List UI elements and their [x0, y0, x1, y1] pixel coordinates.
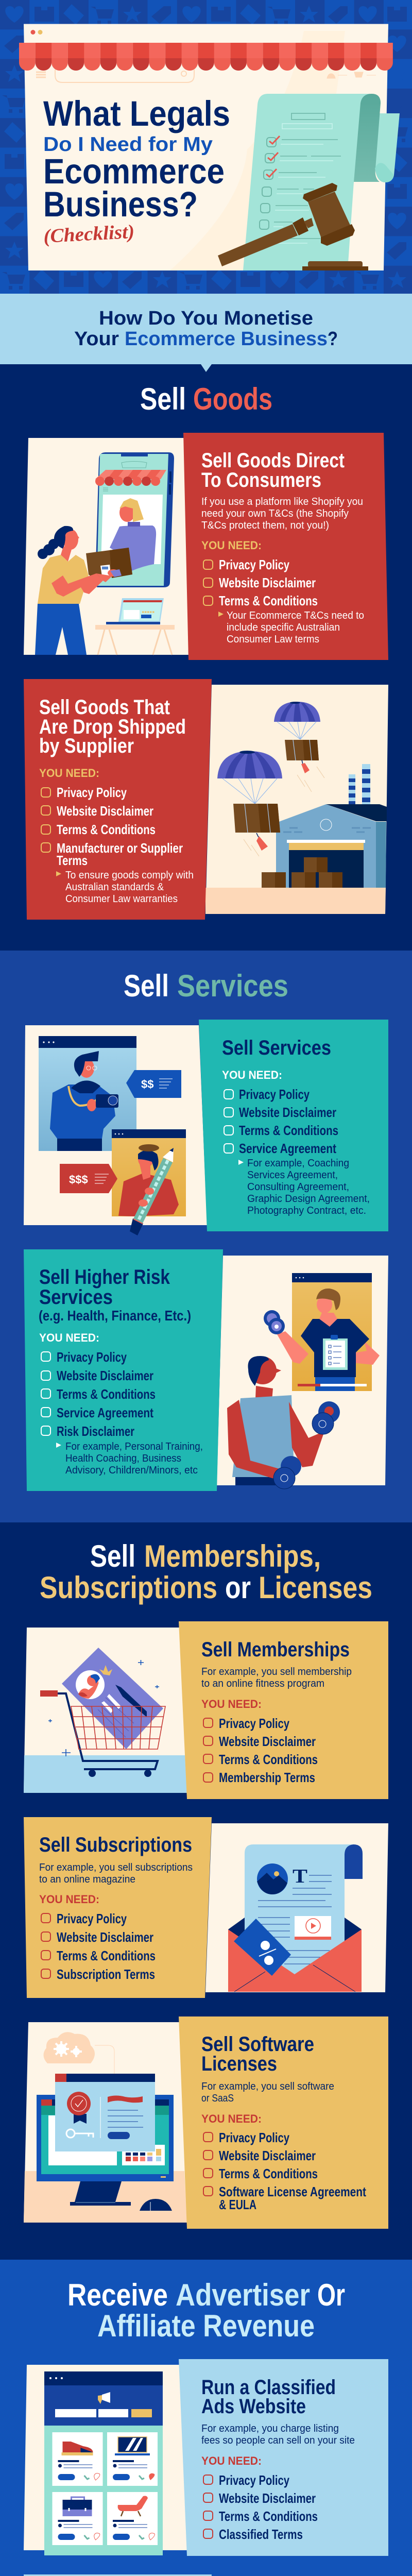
- description: to an online magazine: [39, 1874, 135, 1885]
- panel: higher risk services text card: [24, 1249, 223, 1491]
- description: [39, 1862, 193, 1885]
- checklist: [224, 1087, 338, 1156]
- icon: classified site window: [44, 2371, 163, 2555]
- description: For example, you charge listing: [201, 2423, 339, 2434]
- you need label: YOU NEED:: [39, 1893, 99, 1906]
- heading: Sell Goods That: [39, 696, 170, 719]
- checklist: Privacy Policy: [239, 1087, 310, 1102]
- checklist: Privacy Policy: [57, 785, 127, 800]
- checklist: Website Disclaimer: [219, 575, 316, 590]
- checklist: Privacy Policy: [219, 557, 289, 572]
- awning: [19, 43, 393, 71]
- checklist: [41, 785, 183, 868]
- heading: [201, 2033, 314, 2075]
- panel: advertiser revenue text card: [24, 2574, 212, 2576]
- heading: [201, 449, 345, 492]
- heading: advertiser affiliate: Or: [317, 2278, 345, 2312]
- checklist: [203, 1716, 318, 1785]
- checklist: Terms & Conditions: [219, 2509, 318, 2524]
- checklist: Classified Terms: [219, 2527, 303, 2542]
- icon: license certificate: [55, 2074, 155, 2151]
- price tag: three dollars: [60, 1164, 117, 1193]
- checklist: Manufacturer or Supplier: [57, 840, 183, 856]
- heading: sell goods: Goods: [193, 382, 272, 416]
- heading: sell services: [124, 969, 288, 1003]
- checklist: Service Agreement: [57, 1405, 153, 1420]
- checklist: Subscription Terms: [57, 1967, 155, 1982]
- icon: gavel: [218, 183, 368, 270]
- heading: [39, 1266, 191, 1324]
- you need label: YOU NEED:: [201, 2454, 262, 2467]
- description: T&Cs protect them, not you!): [201, 520, 329, 531]
- section: memberships: [0, 1522, 412, 2260]
- checklist: Terms & Conditions: [219, 593, 318, 608]
- note: Services Agreement,: [247, 1170, 338, 1181]
- icon: factory: [276, 764, 387, 888]
- heading: Ads Website: [201, 2395, 306, 2418]
- icon: checklist scroll: [243, 94, 400, 270]
- note: [56, 1441, 203, 1476]
- note: Australian standards &: [65, 882, 164, 893]
- icon: large parachute box: [217, 751, 282, 856]
- checklist: Website Disclaimer: [239, 1105, 336, 1120]
- description: For example, you sell membership: [201, 1666, 352, 1677]
- title: [43, 94, 230, 247]
- price tag: three dollars: $$$: [69, 1173, 88, 1186]
- checklist: Privacy Policy: [219, 2472, 289, 2488]
- note: Advisory, Children/Minors, etc: [65, 1465, 198, 1476]
- heading: memberships subscriptions licenses: [40, 1539, 372, 1605]
- heading: advertiser affiliate: Affiliate Revenue: [97, 2309, 315, 2343]
- note: Consumer Law terms: [227, 634, 319, 645]
- heading: memberships subscriptions licenses: Licenses: [259, 1570, 372, 1605]
- icon: magazine in envelope: [228, 1844, 363, 1992]
- hero background pattern: [0, 0, 412, 294]
- panel: sell goods direct text card: [183, 433, 388, 660]
- you need label: YOU NEED:: [201, 539, 262, 552]
- heading: (e.g. Health, Finance, Etc.): [39, 1308, 191, 1324]
- heading: sell goods: [140, 382, 272, 416]
- note: [238, 1158, 370, 1216]
- icon: stacked boxes: [262, 857, 342, 888]
- checklist: Website Disclaimer: [219, 1734, 316, 1749]
- icon: phone storefront: [95, 452, 174, 587]
- panel: subscriptions image: [205, 1823, 388, 1992]
- checklist: Website Disclaimer: [219, 2148, 316, 2163]
- note: Photography Contract, etc.: [247, 1205, 366, 1216]
- panel: how do you monetise banner: [0, 294, 412, 364]
- you need label: YOU NEED:: [201, 1698, 262, 1710]
- checklist: Privacy Policy: [219, 2130, 289, 2145]
- you need label: YOU NEED:: [39, 1331, 99, 1344]
- icon: shopping cart: [40, 1660, 165, 1777]
- note: Health Coaching, Business: [65, 1453, 181, 1464]
- checklist: Terms & Conditions: [219, 2166, 318, 2181]
- icon: monitor: [37, 2095, 174, 2211]
- heading: Sell Subscriptions: [39, 1834, 192, 1856]
- checklist: [203, 2472, 318, 2542]
- description: [201, 1666, 352, 1689]
- checklist: & EULA: [219, 2197, 256, 2212]
- description: need your own T&Cs (the Shopify: [201, 508, 349, 519]
- note: Graphic Design Agreement,: [247, 1193, 370, 1205]
- panel: how do you monetise banner: Ecommerce Business: [125, 328, 328, 350]
- heading: Services: [39, 1286, 113, 1309]
- checklist: Service Agreement: [239, 1141, 336, 1156]
- title: Do I Need for My: [43, 133, 213, 156]
- checklist: Website Disclaimer: [57, 803, 153, 819]
- description: [201, 496, 363, 531]
- note: Consulting Agreement,: [247, 1181, 349, 1193]
- heading: Sell Higher Risk: [39, 1266, 170, 1289]
- heading: Run a Classified: [201, 2376, 336, 2399]
- heading: memberships subscriptions licenses: Sell: [90, 1539, 135, 1573]
- panel: browser window hero: [24, 24, 388, 270]
- panel: classified ads image: [24, 2365, 187, 2555]
- icon: customer: [35, 526, 112, 655]
- description: For example, you sell subscriptions: [39, 1862, 193, 1873]
- icon: laptop on table: [95, 598, 175, 655]
- icon: membership card: [62, 1648, 163, 1749]
- section: advertiser or affiliate revenue: [0, 2260, 412, 2576]
- section: sell services: [0, 951, 412, 1522]
- checklist: Privacy Policy: [57, 1349, 127, 1365]
- checklist: Privacy Policy: [219, 1716, 289, 1731]
- price tag: two dollars: $$: [141, 1078, 153, 1091]
- note: [56, 870, 194, 905]
- heading: Are Drop Shipped: [39, 716, 186, 738]
- description: [201, 2081, 334, 2104]
- title: Business?: [43, 184, 198, 224]
- listing: briefcase: [53, 2492, 103, 2545]
- panel: memberships text card: [179, 1621, 388, 1799]
- heading: memberships subscriptions licenses: Memberships,: [144, 1539, 321, 1573]
- panel: software image: [24, 2022, 187, 2223]
- floor: [205, 888, 386, 914]
- arrow: [201, 364, 212, 372]
- heading: To Consumers: [201, 469, 321, 492]
- heading: sell services: Sell: [124, 969, 169, 1003]
- note: For example, Personal Training,: [65, 1441, 203, 1452]
- title: Ecommerce: [43, 151, 225, 191]
- panel: memberships image: [24, 1628, 187, 1793]
- checklist: [41, 1349, 156, 1439]
- title: (Checklist): [43, 221, 135, 247]
- panel: how do you monetise banner: How Do You Monetise: [99, 308, 313, 329]
- heading: Sell Goods Direct: [201, 449, 345, 472]
- checklist: Website Disclaimer: [57, 1929, 153, 1945]
- checklist: Software License Agreement: [219, 2184, 366, 2199]
- icon: trainer window: [264, 1273, 380, 1391]
- heading: [39, 696, 186, 757]
- icon: man lifting dumbbells: [227, 1356, 340, 1489]
- listing: shoe: [53, 2432, 103, 2486]
- heading: Licenses: [201, 2053, 277, 2075]
- panel: subscriptions text card: [24, 1817, 212, 1998]
- heading: by Supplier: [39, 735, 134, 757]
- checklist: Terms & Conditions: [219, 1752, 318, 1767]
- panel: how do you monetise banner: ?: [328, 328, 338, 350]
- listing: tv: [107, 2432, 158, 2486]
- checklist: Terms & Conditions: [57, 1948, 156, 1963]
- checklist: Risk Disclaimer: [57, 1423, 134, 1439]
- note: For example, Coaching: [247, 1158, 349, 1169]
- panel: higher risk services image: [217, 1256, 388, 1489]
- checklist: Terms & Conditions: [57, 1386, 156, 1402]
- icon: package handover: [86, 548, 132, 578]
- icon: magazine in envelope: T: [293, 1866, 307, 1887]
- icon: artist window: [112, 1129, 186, 1235]
- heading: [201, 2376, 336, 2418]
- price tag: two dollars: [126, 1070, 181, 1098]
- heading: sell services: Services: [177, 969, 288, 1003]
- heading: sell goods: Sell: [140, 382, 186, 416]
- description: to an online fitness program: [201, 1678, 324, 1689]
- note: [218, 610, 364, 645]
- title: What Legals: [43, 94, 230, 133]
- panel: how do you monetise banner: Your: [74, 328, 119, 350]
- note: To ensure goods comply with: [65, 870, 194, 881]
- icon: photographer window: [39, 1036, 136, 1151]
- heading: advertiser affiliate: Receive: [67, 2278, 168, 2312]
- heading: Sell Software: [201, 2033, 314, 2056]
- note: Consumer Law warranties: [65, 893, 178, 905]
- description: For example, you sell software: [201, 2081, 334, 2092]
- heading: memberships subscriptions licenses: or: [225, 1570, 251, 1605]
- you need label: YOU NEED:: [222, 1069, 282, 1081]
- listing: chaise lounge: [107, 2492, 158, 2545]
- panel: sell services text card: [199, 1020, 388, 1231]
- panel: software text card: [179, 2016, 388, 2229]
- checklist: Terms: [57, 853, 88, 868]
- heading: Sell Services: [222, 1037, 331, 1059]
- checklist: Terms & Conditions: [57, 822, 156, 837]
- panel: sell goods direct to consumers image: [24, 438, 188, 655]
- note: Your Ecommerce T&Cs need to: [227, 610, 364, 621]
- checklist: Website Disclaimer: [57, 1368, 153, 1383]
- icon: small parachute box: [274, 702, 324, 792]
- panel: classified ads text card: [179, 2359, 388, 2556]
- checklist: [41, 1911, 156, 1982]
- checklist: [203, 2130, 366, 2212]
- heading: memberships subscriptions licenses: Subscriptions: [40, 1570, 217, 1605]
- description: If you use a platform like Shopify you: [201, 496, 363, 507]
- checklist: Website Disclaimer: [219, 2490, 316, 2506]
- checklist: [203, 557, 318, 608]
- heading: Sell Memberships: [201, 1638, 350, 1661]
- you need label: YOU NEED:: [39, 767, 99, 779]
- checklist: Terms & Conditions: [239, 1123, 338, 1138]
- panel: drop shipped text card: [24, 679, 212, 920]
- icon: cloud gears: [43, 2032, 114, 2074]
- heading: advertiser affiliate: Advertiser: [176, 2278, 310, 2312]
- checklist: Privacy Policy: [57, 1911, 127, 1926]
- note: include specific Australian: [227, 622, 340, 633]
- panel: drop shipped image: [205, 685, 388, 914]
- description: fees so people can sell on your site: [201, 2435, 355, 2446]
- section: sell goods: [0, 364, 412, 951]
- checklist: Membership Terms: [219, 1770, 315, 1785]
- description: [201, 2423, 355, 2446]
- description: or SaaS: [201, 2093, 234, 2104]
- heading: advertiser affiliate: [67, 2278, 345, 2343]
- you need label: YOU NEED:: [201, 2112, 262, 2125]
- panel: sell services image: [24, 1025, 207, 1235]
